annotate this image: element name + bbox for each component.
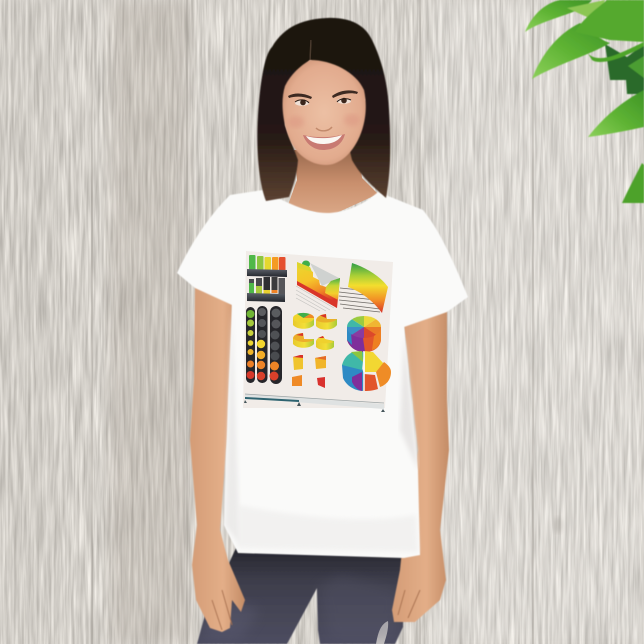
segment three (293, 333, 314, 348)
right arm and hand (392, 310, 449, 622)
hair part (310, 40, 311, 60)
segment seven (292, 375, 302, 386)
segment two (316, 314, 337, 330)
nose shadow (316, 127, 332, 131)
T-shirt (177, 190, 468, 558)
stepped ribbon chart (296, 260, 340, 311)
curved ribbon chart (339, 263, 388, 313)
segment one (293, 313, 314, 329)
dark bars (247, 277, 285, 302)
bar charts (247, 255, 287, 302)
right eyebrow (332, 90, 358, 98)
jeans (197, 548, 404, 644)
traffic light columns (246, 306, 282, 384)
progress ruler (244, 394, 385, 412)
plant leaves (525, 0, 644, 203)
smile (303, 134, 345, 150)
column three (270, 306, 282, 384)
round pie chart (347, 316, 381, 352)
chart print (243, 251, 393, 412)
segment six (315, 356, 326, 369)
segment eight (317, 377, 325, 388)
print background (243, 251, 393, 408)
left eyebrow (288, 93, 312, 99)
cheek blush (288, 114, 360, 128)
left eye (295, 100, 309, 106)
coloured bars (247, 255, 287, 277)
exploded pie chart (342, 351, 391, 391)
segment four (316, 336, 334, 350)
small cylinder segments (292, 313, 337, 388)
face (283, 60, 366, 165)
neck (288, 150, 378, 216)
segment five (293, 355, 303, 370)
column two (257, 306, 268, 383)
hair (257, 18, 390, 201)
left arm and hand (190, 285, 245, 632)
right eye (337, 98, 351, 104)
column one (246, 307, 255, 383)
